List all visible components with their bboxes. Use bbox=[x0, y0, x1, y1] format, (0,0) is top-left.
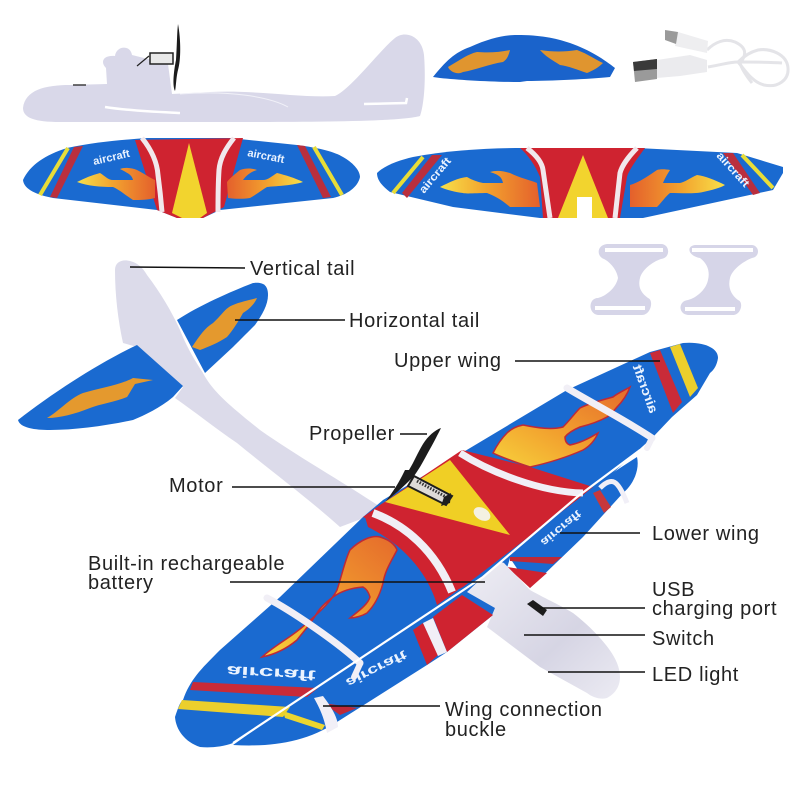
usb port bbox=[527, 600, 547, 616]
label: wing connection buckle: Wing connection bbox=[445, 699, 603, 721]
propeller bbox=[386, 428, 441, 501]
lower wing: aircraft bbox=[538, 507, 585, 549]
centre red panel bbox=[363, 450, 593, 597]
tip stripes bbox=[650, 350, 682, 413]
parts: fuselage side view bbox=[23, 24, 425, 122]
flame: upper section bbox=[493, 387, 630, 467]
label: horizontal tail: Horizontal tail bbox=[349, 310, 480, 332]
label: usb port: charging port bbox=[652, 598, 777, 620]
label: lower wing: Lower wing bbox=[652, 523, 760, 545]
white wing strips bbox=[460, 453, 583, 493]
icon: small motor and propeller bbox=[137, 24, 180, 91]
lower wing bbox=[233, 457, 638, 745]
parts: horizontal tail piece bbox=[433, 35, 615, 82]
flame: lower section bbox=[262, 537, 397, 657]
label: wing connection buckle bbox=[323, 699, 603, 741]
label: usb port: USB bbox=[652, 579, 695, 601]
label: built-in battery: battery bbox=[88, 572, 154, 594]
upper wing bbox=[175, 343, 718, 747]
red band beside the white strip bbox=[365, 517, 458, 605]
main plane bbox=[18, 260, 718, 747]
flame right bbox=[227, 168, 303, 199]
parts: connection buckles bbox=[590, 244, 758, 315]
upper wing: aircraft bbox=[226, 662, 316, 684]
horizontal tail bbox=[18, 283, 268, 430]
label: switch: Switch bbox=[652, 628, 715, 650]
lower wing: aircraft bbox=[344, 647, 410, 690]
label: propeller: Propeller bbox=[309, 423, 395, 445]
parts: upper wing piece: aircraft bbox=[416, 155, 454, 196]
parts: lower wing piece bbox=[23, 138, 360, 218]
label: vertical tail: Vertical tail bbox=[250, 258, 355, 280]
parts: upper wing piece bbox=[377, 148, 783, 219]
battery compartment nose bbox=[467, 562, 620, 699]
seam between the wings bbox=[233, 450, 640, 743]
label: built-in battery bbox=[88, 553, 485, 594]
flame left bbox=[77, 168, 155, 200]
vertical tail and fuselage boom bbox=[115, 260, 385, 527]
parts: USB cable bbox=[633, 30, 788, 86]
parts: lower wing piece: aircraft bbox=[92, 148, 131, 168]
parts: lower wing piece: aircraft bbox=[246, 147, 286, 166]
motor bbox=[408, 476, 452, 506]
switch detail bbox=[471, 504, 493, 524]
upper wing: aircraft bbox=[630, 362, 661, 415]
yellow triangle bbox=[385, 460, 510, 535]
parts: upper wing piece: aircraft bbox=[714, 149, 752, 190]
label: motor: Motor bbox=[169, 475, 223, 497]
label: wing connection buckle: buckle bbox=[445, 719, 507, 741]
label: upper wing: Upper wing bbox=[394, 350, 502, 372]
label: built-in battery: Built-in rechargeable bbox=[88, 553, 285, 575]
label: usb port bbox=[540, 579, 777, 620]
label: led light: LED light bbox=[652, 664, 739, 686]
lower wing root panel bbox=[413, 595, 493, 665]
